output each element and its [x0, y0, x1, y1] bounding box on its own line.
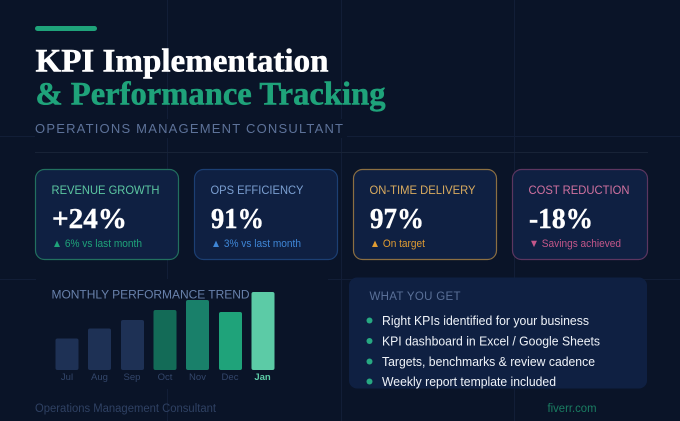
value: 97%	[370, 204, 424, 235]
value: -18%	[529, 204, 593, 235]
month labels: Aug	[91, 372, 108, 383]
list item: Right KPIs identified for your business	[382, 314, 589, 328]
delta: ▲ On target	[370, 238, 425, 250]
list item: Targets, benchmarks & review cadence	[382, 355, 595, 369]
panel: what you get	[349, 278, 647, 389]
title	[36, 44, 386, 112]
delta: ▲ 6% vs last month	[52, 238, 142, 250]
title line 1: KPI Implementation	[36, 44, 328, 80]
month labels: Dec	[222, 372, 239, 383]
chart mask	[36, 279, 328, 389]
label: COST REDUCTION	[528, 183, 630, 197]
panel: on-time delivery	[354, 170, 496, 260]
month labels: Jul	[61, 372, 73, 383]
bars	[56, 292, 274, 370]
subtitle: OPERATIONS MANAGEMENT CONSULTANT	[35, 121, 343, 136]
panel: revenue growth	[36, 170, 178, 260]
label: ON-TIME DELIVERY	[370, 183, 476, 197]
list item: KPI dashboard in Excel / Google Sheets	[382, 334, 600, 348]
month labels: Nov	[189, 372, 206, 383]
accent bar	[35, 26, 97, 31]
title line 2: & Performance Tracking	[36, 76, 386, 112]
month labels: Jan	[254, 372, 271, 383]
footer right: fiverr.com	[548, 403, 596, 415]
bar chart	[52, 288, 274, 383]
month labels: Sep	[124, 372, 140, 383]
label: REVENUE GROWTH	[52, 183, 160, 197]
panel heading: WHAT YOU GET	[370, 291, 460, 303]
value: 91%	[211, 204, 264, 235]
delta: ▲ 3% vs last month	[211, 238, 301, 250]
panel: ops efficiency	[194, 170, 338, 260]
month labels: Oct	[158, 372, 173, 383]
footer left: Operations Management Consultant	[35, 403, 217, 415]
panel: cost reduction	[512, 170, 648, 260]
delta: ▼ Savings achieved	[529, 238, 621, 250]
chart heading: MONTHLY PERFORMANCE TREND	[52, 288, 250, 302]
value: +24%	[52, 204, 127, 235]
label: OPS EFFICIENCY	[210, 183, 304, 197]
list item: Weekly report template included	[382, 375, 556, 389]
month labels	[61, 372, 271, 383]
